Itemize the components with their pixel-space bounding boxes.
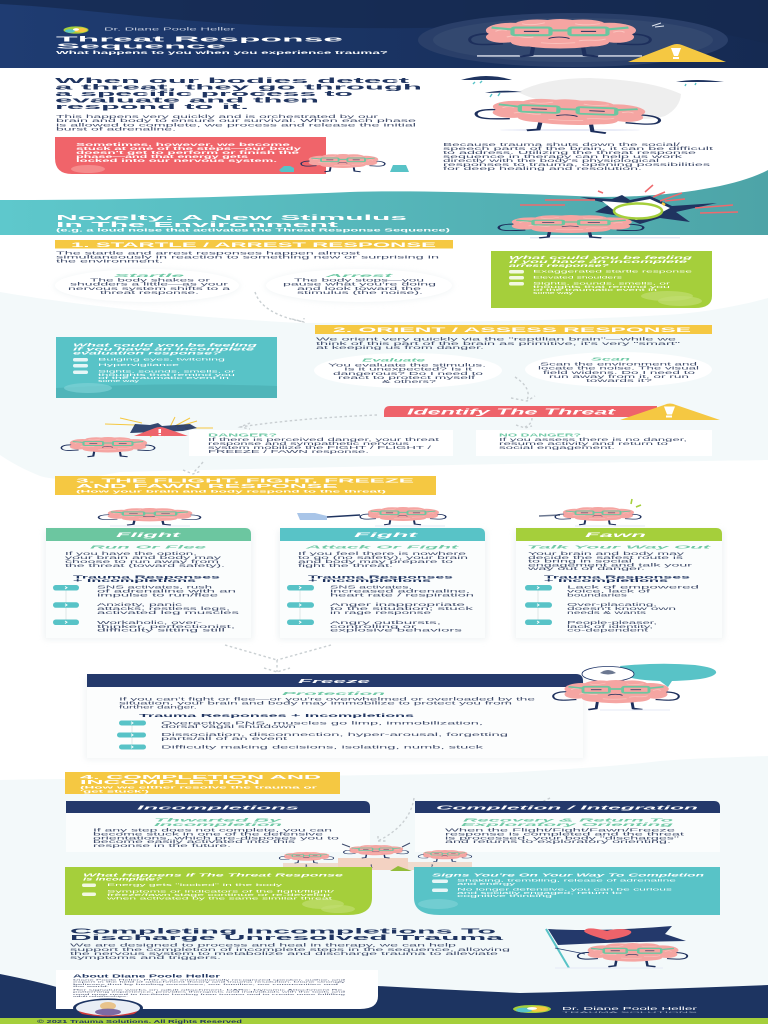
panel: completion: Recovery & Return To: [463, 818, 673, 824]
arrow: assess to identify: [511, 377, 535, 401]
closing paragraph: We are designed to process and heal in therapy, we can help: [70, 943, 458, 948]
panel: evaluate: dangerous? Do I need to: [333, 371, 485, 376]
panel: freeze card: Protection: [282, 691, 385, 697]
callout: stuck: [55, 137, 409, 174]
section 2 intro: We orient very quickly via the "reptilian brain"—while we: [316, 337, 679, 342]
panel: signs of completion: and socially engaged, return to: [457, 891, 622, 895]
icon: brains on podium: 1: [370, 864, 373, 870]
panel: fawn card: [514, 528, 724, 640]
panel: fight card: fight the threat.: [298, 563, 393, 568]
panel: about: the world.: [73, 985, 110, 988]
section 2 intro: think of this part of the brain as primitive, it's very "smart": [316, 341, 682, 346]
panel: arrest feeling box: thoughts that remind you: [533, 285, 670, 289]
panel: startle: The body shakes or: [90, 278, 212, 282]
panel: arrest: and look toward the: [297, 286, 423, 291]
callout: stuck: stuck at one of the steps—our body: [76, 146, 303, 151]
panel: no danger: resume activity and return to: [499, 441, 670, 446]
panel: freeze card: further danger.: [119, 705, 197, 710]
section bar 4: (How we either resolve the trauma or: [80, 785, 319, 789]
panel: arrest feeling box: Sights, sounds, smells, or: [533, 282, 673, 286]
panel: flight card: thinker, perfectionist,: [97, 624, 235, 629]
copyright: © 2021 Trauma Solutions. All Rights Reserved: [37, 1019, 243, 1024]
section bar 2: [315, 325, 712, 334]
panel: fawn card: doesn't know own: [567, 606, 678, 611]
closing paragraph: [70, 943, 513, 960]
panel: flight card: If you have the option,: [65, 551, 197, 556]
panel: flight card: Flight: [116, 532, 184, 539]
panel: fawn card: co-dependent: [567, 628, 651, 633]
panel: what happens if incomplete: [65, 867, 372, 915]
title: Sequence: [56, 44, 227, 50]
panel: completion: is processed, your body "discharges": [445, 835, 681, 840]
right paragraph: responses to trauma, opening possibilities: [443, 162, 710, 167]
panel: incompletions: orientations, which pre-disposes you to: [93, 835, 341, 840]
panel: arrest feeling box: arrest response?: [509, 263, 610, 268]
panel: no danger: [476, 430, 712, 456]
panel: fawn card: needs & wants: [567, 610, 646, 615]
panel: danger: response and sympathetic nervous: [208, 441, 409, 446]
panel: fawn card: People-pleaser,: [567, 620, 657, 625]
arrow: to section 3: [183, 462, 203, 474]
right paragraph: [443, 142, 716, 171]
panel: flight card: the threat (toward safety).: [65, 563, 225, 568]
heading: novelty: Novelty: A New Stimulus: [56, 215, 407, 222]
panel: freeze card: situation, your brain and body may immobilize to protect you from: [119, 701, 514, 706]
panel: evaluation feeling box: some way: [98, 379, 140, 383]
panel: incompletions: Incompletions: [137, 806, 299, 812]
panel: freeze card: dorsal vagal shutdown: [161, 724, 298, 729]
heading: when our bodies: evaluate and then: [55, 98, 319, 104]
section bar 3: [55, 476, 436, 495]
section 1 intro: [56, 250, 442, 263]
arrow: to no danger: [516, 418, 532, 428]
panel: flight card: of adrenaline with an: [97, 589, 239, 594]
footer wave: [0, 974, 768, 1024]
panel: flight card: Anxiety, panic: [97, 602, 182, 607]
panel: about: road map need to facilitate healing from trauma and to create more fulfilling: [73, 993, 348, 996]
panel: fawn card: decide the safest route is: [528, 555, 683, 560]
panel: arrest: pause what you're doing: [283, 282, 438, 286]
logo: [64, 26, 88, 34]
panel: flight card: + Incompletions: [73, 578, 197, 584]
panel: arrest: [265, 269, 453, 303]
panel: completion: Completion / Integration: [436, 806, 701, 812]
panel: incompletions: Thwarted By: [154, 818, 282, 824]
title: [56, 36, 344, 50]
panel: incompletions: response in the future.: [93, 843, 231, 848]
panel: arrest feeling box: Elevated shoulders: [533, 276, 623, 280]
panel: evaluation feeling box: Hypervigilance: [98, 363, 179, 367]
arrow: responses to freeze: [225, 645, 331, 672]
intro paragraph: brain and body to ensure our survival. When each phase: [56, 118, 419, 123]
heading: when our bodies: [55, 78, 422, 111]
panel: signs of completion: and energy: [457, 882, 516, 886]
panel: signs of completion: Signs You're On Your Way To Completion: [432, 873, 706, 878]
panel: incompletions: [66, 801, 370, 852]
panel: arrest feeling box: if you have an incomplete: [509, 259, 690, 264]
panel: evaluation feeling box: if you have an incomplete: [73, 347, 257, 352]
panel: completion: Exploratory Orienting: [461, 822, 673, 828]
panel: scan: Scan the environment and: [540, 362, 699, 367]
panel: fawn card: Lack of empowered: [567, 585, 702, 590]
panel: danger: system mobilize the FIGHT / FLIGHT /: [208, 445, 434, 450]
panel: fawn card: voice, lack of: [567, 589, 653, 594]
title: Threat Response: [56, 36, 344, 44]
intro paragraph: is allowed to complete, we process and release the initial: [56, 122, 416, 127]
panel: fawn card: lack of identity,: [567, 624, 653, 629]
heading: when our bodies: a threat, they go through: [55, 84, 422, 92]
arrow: freeze to completion: [512, 798, 550, 841]
panel: scan: towards it?: [586, 378, 654, 383]
panel: freeze card: Difficulty making decisions, isolating, numb, stuck: [161, 744, 486, 749]
callout: stuck: Sometimes, however, we become: [76, 142, 292, 147]
panel: evaluation feeling box: Bulging eyes, twitching: [98, 357, 225, 361]
panel: danger: DANGER?: [208, 433, 279, 438]
callout: stuck: doesn't get to perform or finish the: [76, 150, 301, 155]
panel: scan: run away from it, or run: [549, 374, 691, 379]
panel: completion: response is completed and the threat: [445, 832, 687, 837]
section bar 3: (How your brain and body respond to the threat): [76, 489, 386, 493]
panel: danger: If there is perceived danger, your threat: [208, 437, 442, 442]
callout: stuck: locked into our nervous system.: [76, 158, 277, 163]
panel: flight card: impulse to run/flee: [97, 593, 221, 598]
panel: fawn card: + Incompletions: [544, 578, 669, 584]
icon: freeze brain with thought bubbles: [553, 664, 716, 710]
icon: startled brain: [499, 215, 680, 238]
arrow: to danger: [240, 415, 377, 429]
panel: about: believes that by healing ourselves, our families, our communities and: [73, 983, 341, 986]
icon: danger brain: [61, 417, 213, 457]
panel: no danger: If you assess there is no danger,: [499, 437, 687, 442]
panel: incompletions: Incompletion: [154, 822, 282, 828]
icon: flight brain: [99, 508, 200, 526]
panel: incompletions: become stuck in one of the defensive: [93, 832, 325, 837]
subtitle: What happens to you when you experience trauma?: [56, 50, 389, 55]
panel: evaluate: Evaluate: [362, 358, 426, 364]
panel: danger: FREEZE / FAWN response.: [208, 449, 369, 454]
brand name bottom: Dr. Diane Poole Heller: [562, 1006, 699, 1011]
section 1 intro: The startle and arrest responses happen almost: [56, 250, 363, 255]
panel: what happens if incomplete: Energy gets "locked" in the body: [107, 883, 283, 887]
panel: flight card: [44, 528, 253, 640]
panel: what happens if incomplete: Symptoms or indicators of the fight/flight/: [107, 889, 334, 893]
panel: fight card: If you feel there is nowhere: [298, 551, 468, 556]
panel: signs of completion: Shaking, trembling, release of adrenaline: [457, 879, 676, 883]
panel: flight card: your brain and body may: [65, 555, 224, 560]
panel: scan: field widens. Do I need to: [543, 370, 697, 375]
panel: freeze card: Overactive PNS, muscles go limp, immobilization,: [161, 720, 483, 725]
panel: freeze card: parts/all of an event: [161, 736, 290, 741]
brand name: Dr. Diane Poole Heller: [104, 27, 237, 32]
panel: fawn card: Your brain and body may: [528, 551, 687, 556]
banner: identify the threat: Identify The Threat: [407, 408, 616, 417]
panel: fawn card: Fawn: [585, 532, 647, 539]
heading: completing incompletions: Completing Incompletions To: [70, 928, 496, 935]
panel: flight card: choose to run away from: [65, 559, 221, 564]
panel: about: adult relationships.: [73, 995, 129, 998]
panel: arrest feeling box: Exaggerated startle response: [533, 270, 692, 274]
panel: evaluation feeling box: thoughts that remind you: [98, 373, 235, 377]
panel: fight card: SNS activates,: [330, 585, 412, 590]
heading: completing incompletions: Discharge Unresolved Trauma: [70, 935, 503, 942]
section 1 intro: the environment.: [56, 258, 163, 263]
panel: incompletions: become easily activated into this: [93, 839, 295, 844]
panel: fight card: [278, 528, 487, 640]
panel: arrest feeling box: [491, 251, 712, 308]
right paragraph: directly with the body's physiological: [443, 158, 659, 163]
panel: arrest: stimulus (the noise).: [297, 290, 423, 295]
section bar 3: AND FAWN RESPONSE: [76, 484, 338, 490]
panel: evaluation feeling box: evaluation response?: [73, 350, 223, 356]
panel: signs of completion: cognitive thinking: [457, 894, 552, 898]
panel: fight card: Fight: [354, 532, 421, 539]
panel: fight card: in rage response: [330, 610, 433, 615]
panel: scan: Scan: [591, 357, 630, 363]
panel: fight card: Angry outbursts,: [330, 620, 441, 625]
panel: evaluate: Is it unexpected? Is it: [344, 367, 475, 372]
panel: no danger: NO DANGER?: [499, 433, 582, 438]
panel: arrest feeling box: What could you be feeling: [509, 255, 694, 260]
panel: what happens if incomplete: freeze/fawn stage continue or re-develop: [107, 893, 330, 897]
panel: freeze card: [85, 674, 585, 760]
heading: when our bodies: a specific process to: [55, 91, 353, 98]
icon: brain with heart flag: [546, 926, 687, 968]
arrow: freeze to incompletions: [378, 798, 414, 841]
panel: incompletions: If any step does not complete, you can: [93, 828, 334, 833]
panel: what happens if incomplete: Is Incomplete?: [83, 877, 163, 882]
panel: arrest feeling box: of the traumatic event in: [533, 288, 657, 292]
closing paragraph: symptoms and triggers.: [70, 955, 221, 960]
panel: startle: shudders a little—as your: [70, 282, 230, 286]
header band: [0, 0, 768, 68]
right paragraph: for deep healing and resolution.: [443, 166, 642, 171]
heading: novelty: [56, 215, 407, 229]
panel: evaluate: You evaluate the stimulus.: [328, 363, 486, 368]
panel: fawn card: engagement and talk your: [528, 562, 694, 568]
panel: startle: nervous system shifts to a: [68, 286, 232, 291]
panel: no danger: social engagement.: [499, 445, 615, 450]
panel: about: Her signature works on adult attachment, DARe: Dynamic Attachment Re-: [73, 988, 346, 992]
intro paragraph: burst of adrenaline.: [56, 126, 176, 131]
right paragraph: speech parts of the brain, it can be difficult: [443, 146, 716, 151]
section bar 1: 1. STARTLE / ARREST RESPONSE: [71, 242, 438, 249]
panel: fight card: heart rate / respiration: [330, 593, 477, 598]
panel: what happens if incomplete: when activated by the same similar threat: [107, 897, 332, 901]
panel: evaluation feeling box: Sights, sounds, smells, or: [98, 370, 238, 374]
section bar 4: INCOMPLETION: [80, 780, 260, 786]
panel: what happens if incomplete: What Happens If The Threat Response: [83, 873, 345, 878]
icon: warning triangle: [620, 404, 720, 420]
icon: brains on podium: [270, 843, 472, 871]
panel: fight card: to the situation; stuck: [330, 606, 476, 611]
panel: fawn card: Over-placating,: [567, 602, 657, 607]
panel: signs of completion: [414, 867, 720, 915]
right paragraph: Because trauma shuts down the social/: [443, 142, 683, 147]
section bar 4: [65, 772, 340, 794]
panel: fawn card: Talk Your Way Out: [527, 545, 712, 551]
panel: evaluation feeling box: [56, 337, 277, 398]
panel: completion: and returns to exploratory orienting.: [445, 839, 671, 844]
panel: fight card: to go (no safety), your brain: [298, 555, 470, 560]
icon: header brain: [470, 19, 664, 57]
arrow: arrest to orient: [255, 292, 304, 322]
portrait: [73, 998, 143, 1018]
panel: fight card: and body may prepare to: [298, 559, 455, 564]
panel: fight card: increased adrenaline,: [330, 589, 470, 594]
panel: freeze card: Dissociation, disconnection, hyper-arousal, forgetting: [161, 732, 511, 737]
panel: evaluation feeling box: of the traumatic event in: [98, 376, 229, 380]
heading: completing incompletions: [70, 928, 503, 942]
subheading: (e.g. a loud noise that activates the Threat Response Sequence): [56, 228, 452, 232]
panel: fight card: Anger inappropriate: [330, 602, 468, 607]
panel: arrest feeling box: some way: [533, 291, 574, 295]
icon: brains on podium: 2: [431, 864, 434, 868]
panel: signs of completion: No longer defensive, you can be curious: [457, 888, 673, 892]
panel: freeze card: Freeze: [298, 679, 370, 685]
panel: fawn card: Trauma Responses: [544, 574, 691, 580]
panel: fawn card: to bring in social: [528, 559, 632, 564]
panel: fight card: + Incompletions: [308, 578, 432, 584]
panel: fawn card: way out of danger.: [528, 566, 645, 571]
callout: stuck: phase—and that energy gets: [76, 154, 250, 159]
panel: evaluate: [314, 353, 502, 388]
icon: brains on podium: 3: [305, 864, 308, 868]
right paragraph: to address. Utilizing the threat response: [443, 150, 699, 155]
panel: evaluate: & others?: [382, 379, 438, 384]
logo bottom: [513, 1005, 551, 1013]
panel: freeze card: Trauma Responses + Incompletions: [139, 713, 415, 719]
panel: fight card: Trauma Responses: [308, 574, 454, 580]
panel: completion: When the Flight/Fight/Fawn/Freeze: [445, 828, 678, 833]
section bar 4: 4. COMPLETION AND: [80, 775, 321, 781]
brand name bottom: [562, 1006, 700, 1014]
panel: novelty band: [0, 170, 768, 238]
section 1 intro: simultaneously in reaction to something new or surprising in: [56, 254, 442, 259]
icon: running brain with clouds: [461, 76, 724, 135]
panel: flight card: attacks, restless legs,: [97, 606, 230, 611]
panel: flight card: difficulty sitting still: [97, 628, 225, 633]
panel: flight card: SNS activates, rush: [97, 585, 214, 590]
section 2 intro: at keeping us from danger.: [316, 345, 484, 350]
panel: flight card: Trauma Responses: [73, 574, 221, 580]
section bar 2: 2. ORIENT / ASSESS RESPONSE: [333, 327, 693, 334]
right paragraph: sequence in therapy can help us work: [443, 154, 685, 159]
panel: flight card: activated leg muscles: [97, 610, 239, 615]
panel: fight card: explosive behaviors: [330, 628, 462, 633]
panel: evaluate: react to protect myself: [338, 375, 478, 380]
panel: danger: [189, 430, 453, 456]
icon: warning triangle: [628, 44, 726, 62]
panel: startle: Startle: [114, 273, 186, 279]
heading: novelty: In The Environment: [56, 222, 341, 229]
panel: flight card: Workaholic, over-: [97, 620, 204, 625]
icon: alarm clock burst: [520, 185, 738, 224]
section bar 1: [55, 240, 453, 249]
icon: fawn brain: [539, 499, 645, 526]
closing paragraph: support the completion of incomplete steps in the sequence, allowing: [70, 947, 513, 952]
intro paragraph: [56, 114, 419, 131]
panel: fight card: Attack Or Fight: [302, 545, 460, 551]
panel: arrest: Arrest: [321, 273, 394, 279]
heading: when our bodies: respond to it.: [55, 104, 249, 111]
section 2 intro: [316, 337, 682, 350]
panel: freeze card: If you can't fight or flee—or you're overwhelmed or overloaded by the: [119, 697, 537, 702]
heading: when our bodies: When our bodies detect: [55, 78, 412, 85]
panel: about: About Diane Poole Heller: [73, 973, 221, 978]
panel: about: [56, 970, 378, 1009]
section bar 4: 'get stuck'): [80, 789, 149, 793]
panel: startle: [54, 269, 240, 303]
panel: arrest: The body stops—you: [294, 278, 424, 282]
panel: about: Diane Poole Heller, PhD is an internationally recognized speaker, author, and: [73, 978, 348, 982]
panel: flight card: Run Or Flee: [90, 545, 207, 551]
background washes: [0, 292, 768, 1024]
icon: fight brain with shield: [297, 507, 446, 526]
panel: about: patterning experience, provides therapists and individuals with the tools and: [73, 991, 348, 994]
intro paragraph: This happens very quickly and is orchestrated by our: [56, 114, 380, 119]
panel: scan: [525, 352, 712, 387]
panel: fight card: controlling or: [330, 624, 418, 629]
panel: startle: threat response.: [100, 290, 199, 295]
panel: completion: [415, 801, 720, 852]
brand name bottom: TRAUMA SOLUTIONS: [562, 1011, 700, 1014]
closing paragraph: the nervous system to metabolize and discharge trauma to alleviate: [70, 951, 500, 956]
section bar 3: 3. THE FLIGHT, FIGHT, FREEZE: [76, 478, 414, 484]
panel: about: expert in the field of attachment theory and trauma resolution. Diane strongly: [73, 981, 348, 984]
panel: fawn card: boundaries: [567, 593, 627, 598]
panel: evaluation feeling box: What could you be feeling: [73, 343, 259, 348]
panel: scan: locate the noise. The visual: [538, 366, 699, 371]
banner: identify the threat: [384, 404, 720, 420]
